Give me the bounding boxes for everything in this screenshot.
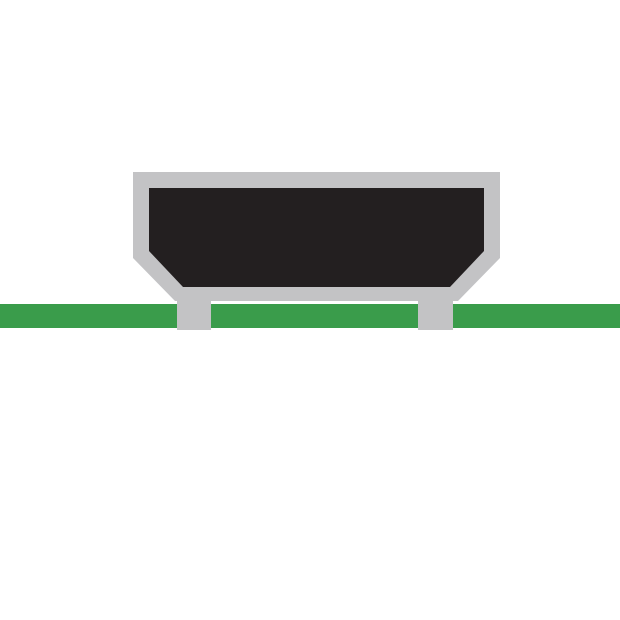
green line xyxy=(0,304,620,328)
connector shell xyxy=(133,172,500,301)
connector left leg xyxy=(177,296,211,330)
connector right leg xyxy=(418,296,453,330)
